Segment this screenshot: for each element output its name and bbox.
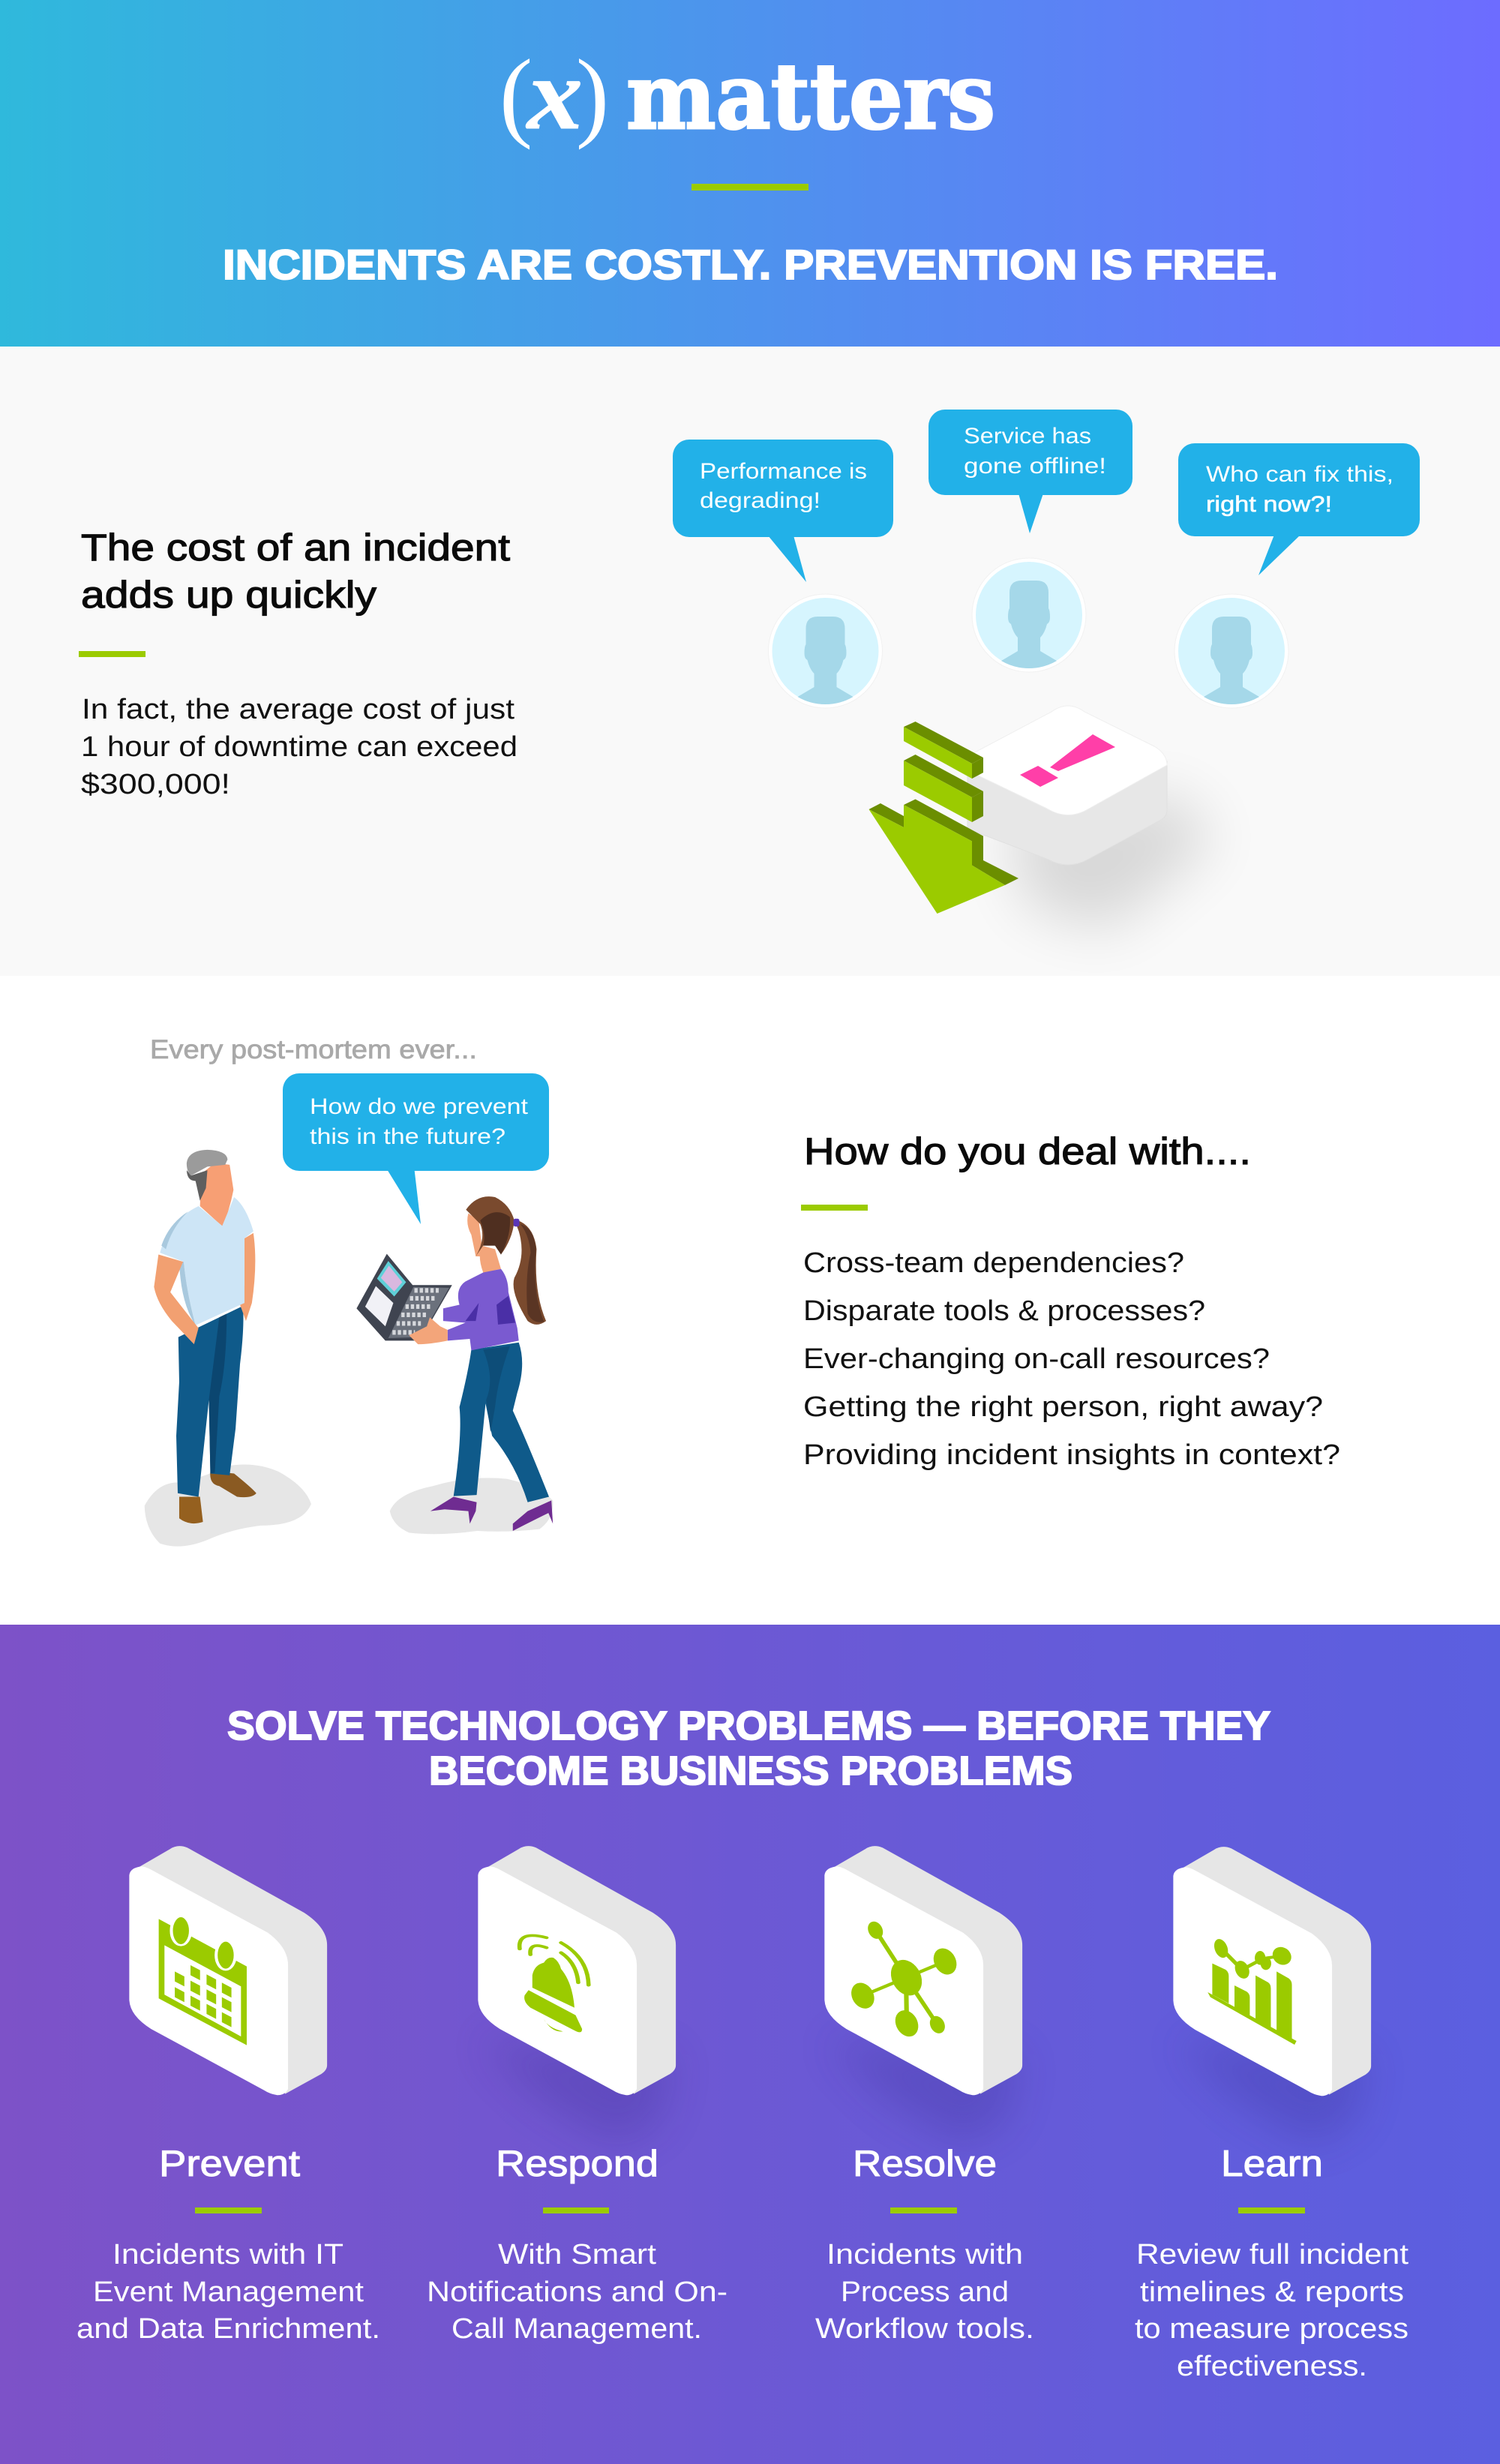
panel: solve technology problems — [0, 1625, 1500, 2464]
icon: bell tile — [478, 1846, 676, 2095]
list: challenges: Getting the right person, right away? — [803, 1391, 1323, 1423]
speech bubble: service offline — [928, 410, 1132, 533]
accent bar — [79, 651, 146, 657]
speech bubble: service offline: gone offline! — [964, 454, 1106, 479]
laptop — [356, 1254, 452, 1340]
column: prevent: Event Management — [93, 2276, 364, 2308]
speech bubble: performance: Performance is — [700, 459, 867, 484]
column: learn: timelines & reports — [1140, 2276, 1404, 2308]
speech bubble: prevent in future: this in the future? — [310, 1124, 506, 1149]
heading: solve technology problems: SOLVE TECHNOLOGY PROBLEMS — BEFORE THEY — [227, 1703, 1270, 1748]
illustration: woman with laptop — [356, 1196, 553, 1534]
logo: (x) matters: ( — [500, 39, 532, 150]
panel: header — [0, 0, 1500, 347]
column: respond: Notifications and On- — [427, 2276, 728, 2308]
header accent bar — [692, 184, 808, 191]
logo: (x) matters — [500, 38, 995, 151]
accent bar — [801, 1205, 868, 1211]
icon: chart tile — [1173, 1847, 1371, 2096]
logo: (x) matters: ) — [576, 39, 609, 150]
icon: network tile — [824, 1846, 1022, 2095]
speech bubble: who can fix: Who can fix this, — [1206, 462, 1394, 487]
logo: (x) matters: x — [526, 38, 583, 151]
avatar: centre — [972, 558, 1086, 672]
column: resolve: Workflow tools. — [815, 2313, 1034, 2345]
heading: cost of an incident: adds up quickly — [81, 574, 376, 616]
column: prevent — [76, 2144, 380, 2345]
icon: shadows behind tiles — [480, 2040, 1370, 2145]
text: average downtime cost: 1 hour of downtime can exceed — [81, 731, 518, 763]
column: learn: Learn — [1221, 2144, 1323, 2184]
panel: cost of an incident — [0, 347, 1500, 976]
list: challenges: Ever-changing on-call resources? — [803, 1343, 1270, 1375]
column: prevent: Incidents with IT — [112, 2239, 344, 2270]
heading: cost of an incident — [81, 527, 510, 616]
list: challenges: Cross-team dependencies? — [803, 1247, 1184, 1279]
speech bubble: who can fix — [1178, 443, 1420, 575]
heading: cost of an incident: The cost of an incident — [81, 527, 510, 569]
exclamation mark — [1020, 734, 1115, 787]
icon: isometric alert box with down arrow — [868, 706, 1215, 930]
icon: calendar tile — [129, 1846, 327, 2095]
avatar: left — [768, 594, 882, 708]
heading: solve technology problems — [227, 1703, 1270, 1793]
heading: solve technology problems: BECOME BUSINESS PROBLEMS — [429, 1748, 1072, 1793]
list: challenges — [803, 1247, 1340, 1471]
text: average downtime cost: $300,000! — [81, 769, 230, 800]
speech bubble: performance — [673, 440, 893, 582]
speech bubble: who can fix: right now?! — [1206, 492, 1332, 517]
column: respond: With Smart — [498, 2239, 656, 2270]
column: resolve: Resolve — [853, 2144, 997, 2184]
speech bubble: prevent in future: How do we prevent — [310, 1094, 529, 1119]
column: learn: Review full incident — [1136, 2239, 1408, 2270]
column: resolve — [815, 2144, 1034, 2345]
stepped green arrow — [868, 722, 1018, 914]
column: prevent: and Data Enrichment. — [76, 2313, 380, 2345]
column: respond: Respond — [496, 2144, 658, 2184]
column: learn — [1135, 2144, 1408, 2382]
column: learn: to measure process — [1135, 2313, 1408, 2345]
text: average downtime cost — [81, 694, 518, 800]
logo: (x) matters: matters — [626, 43, 995, 150]
speech bubble: service offline: Service has — [964, 424, 1091, 449]
column: prevent: Prevent — [159, 2144, 300, 2184]
caption: every post-mortem: Every post-mortem ever... — [150, 1035, 477, 1064]
avatar: right — [1174, 594, 1288, 708]
column: respond: Call Management. — [452, 2313, 702, 2345]
panel: post-mortem — [0, 976, 1500, 1625]
heading: how do you deal with: How do you deal with.... — [804, 1130, 1251, 1172]
column: resolve: Incidents with — [826, 2239, 1023, 2270]
column: resolve: Process and — [841, 2276, 1009, 2308]
list: challenges: Providing incident insights in context? — [803, 1439, 1340, 1471]
speech bubble: prevent in future — [283, 1073, 549, 1224]
header tagline: INCIDENTS ARE COSTLY. PREVENTION IS FREE. — [223, 241, 1278, 288]
speech bubble: performance: degrading! — [700, 488, 820, 513]
column: learn: effectiveness. — [1177, 2351, 1367, 2382]
column: respond — [427, 2144, 728, 2345]
illustration: man standing — [145, 1150, 311, 1547]
text: average downtime cost: In fact, the average cost of just — [82, 694, 514, 725]
list: challenges: Disparate tools & processes? — [803, 1295, 1205, 1327]
